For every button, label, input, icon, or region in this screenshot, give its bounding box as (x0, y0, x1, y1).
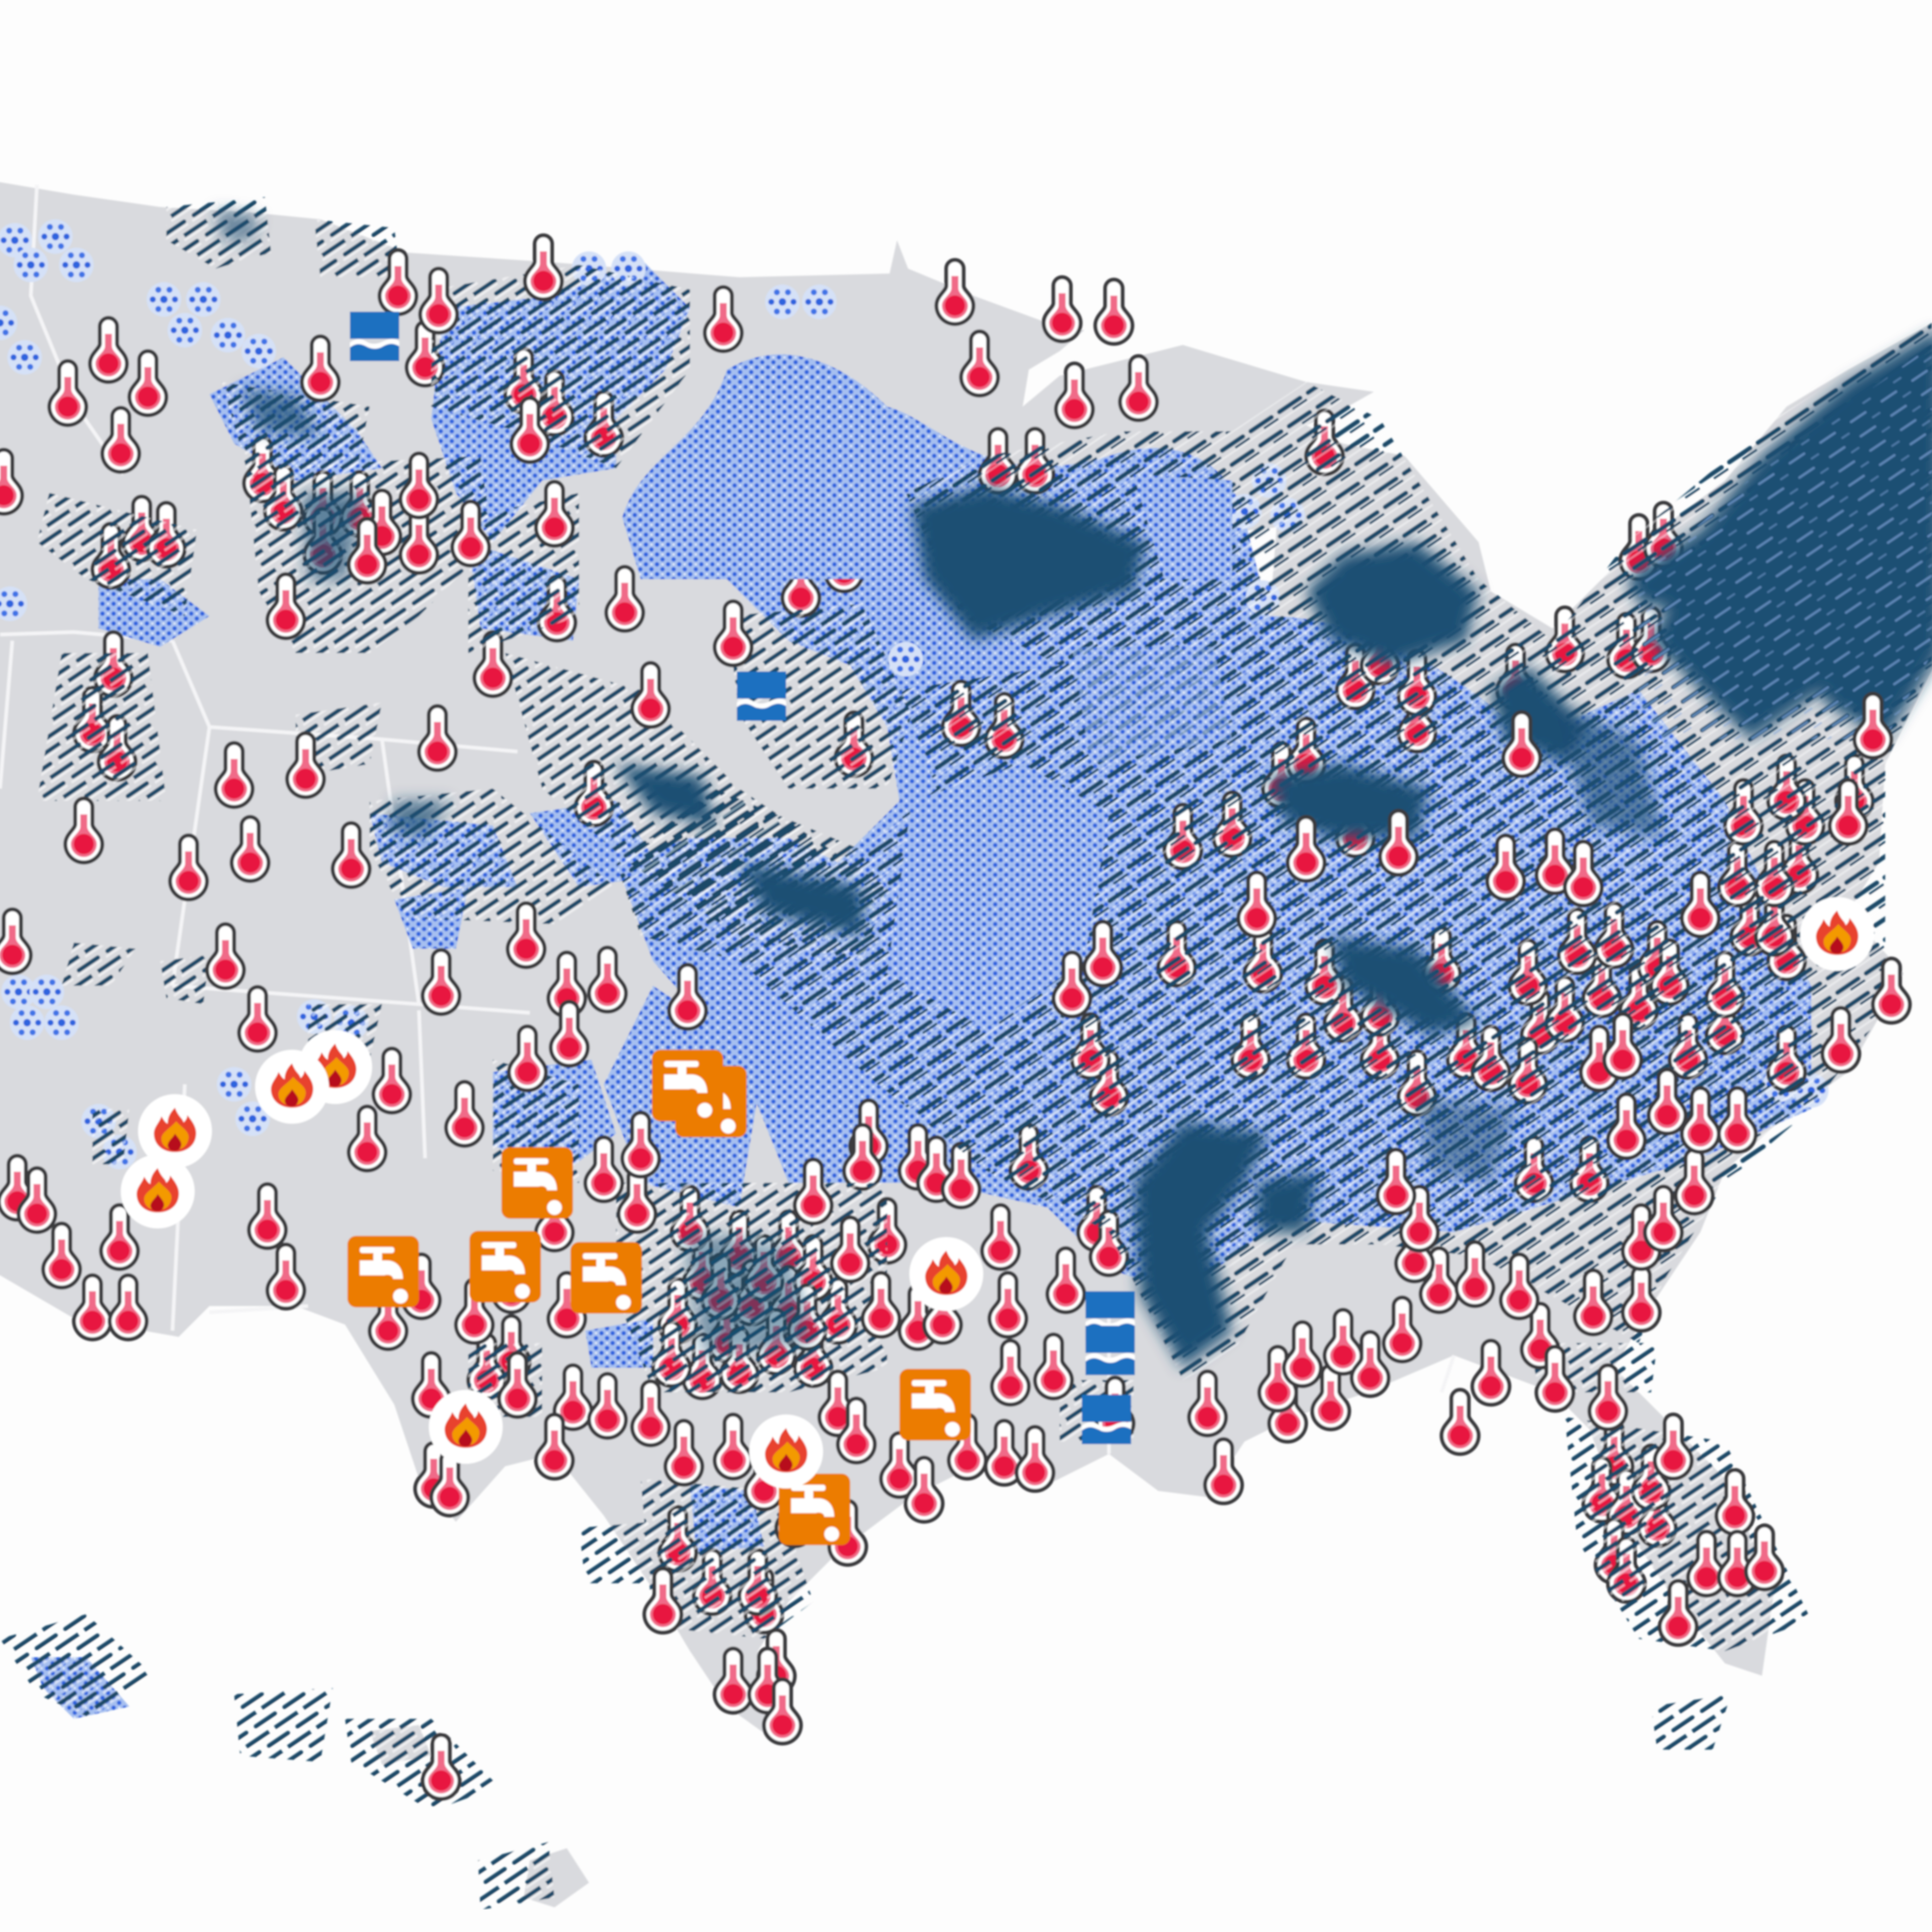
icons: wildfires (121, 897, 1874, 1488)
dark saturated rain clusters (216, 209, 1932, 1367)
thermometers beneath the hatching (74, 321, 1873, 1633)
clear snow zones (640, 474, 1232, 1029)
icons: water shortage faucets (348, 1050, 971, 1545)
state borders (0, 185, 1454, 1454)
light streaks within the dark northeast cluster (1639, 345, 1932, 739)
dense hatching: eastern rain band (616, 320, 1932, 1380)
lake michigan (1232, 527, 1276, 592)
land: Hawaii islands (370, 1725, 589, 1907)
icons: flooding (350, 312, 1135, 1444)
snow coverage areas (31, 259, 1811, 1719)
scattered snow flakes (0, 219, 1828, 1169)
